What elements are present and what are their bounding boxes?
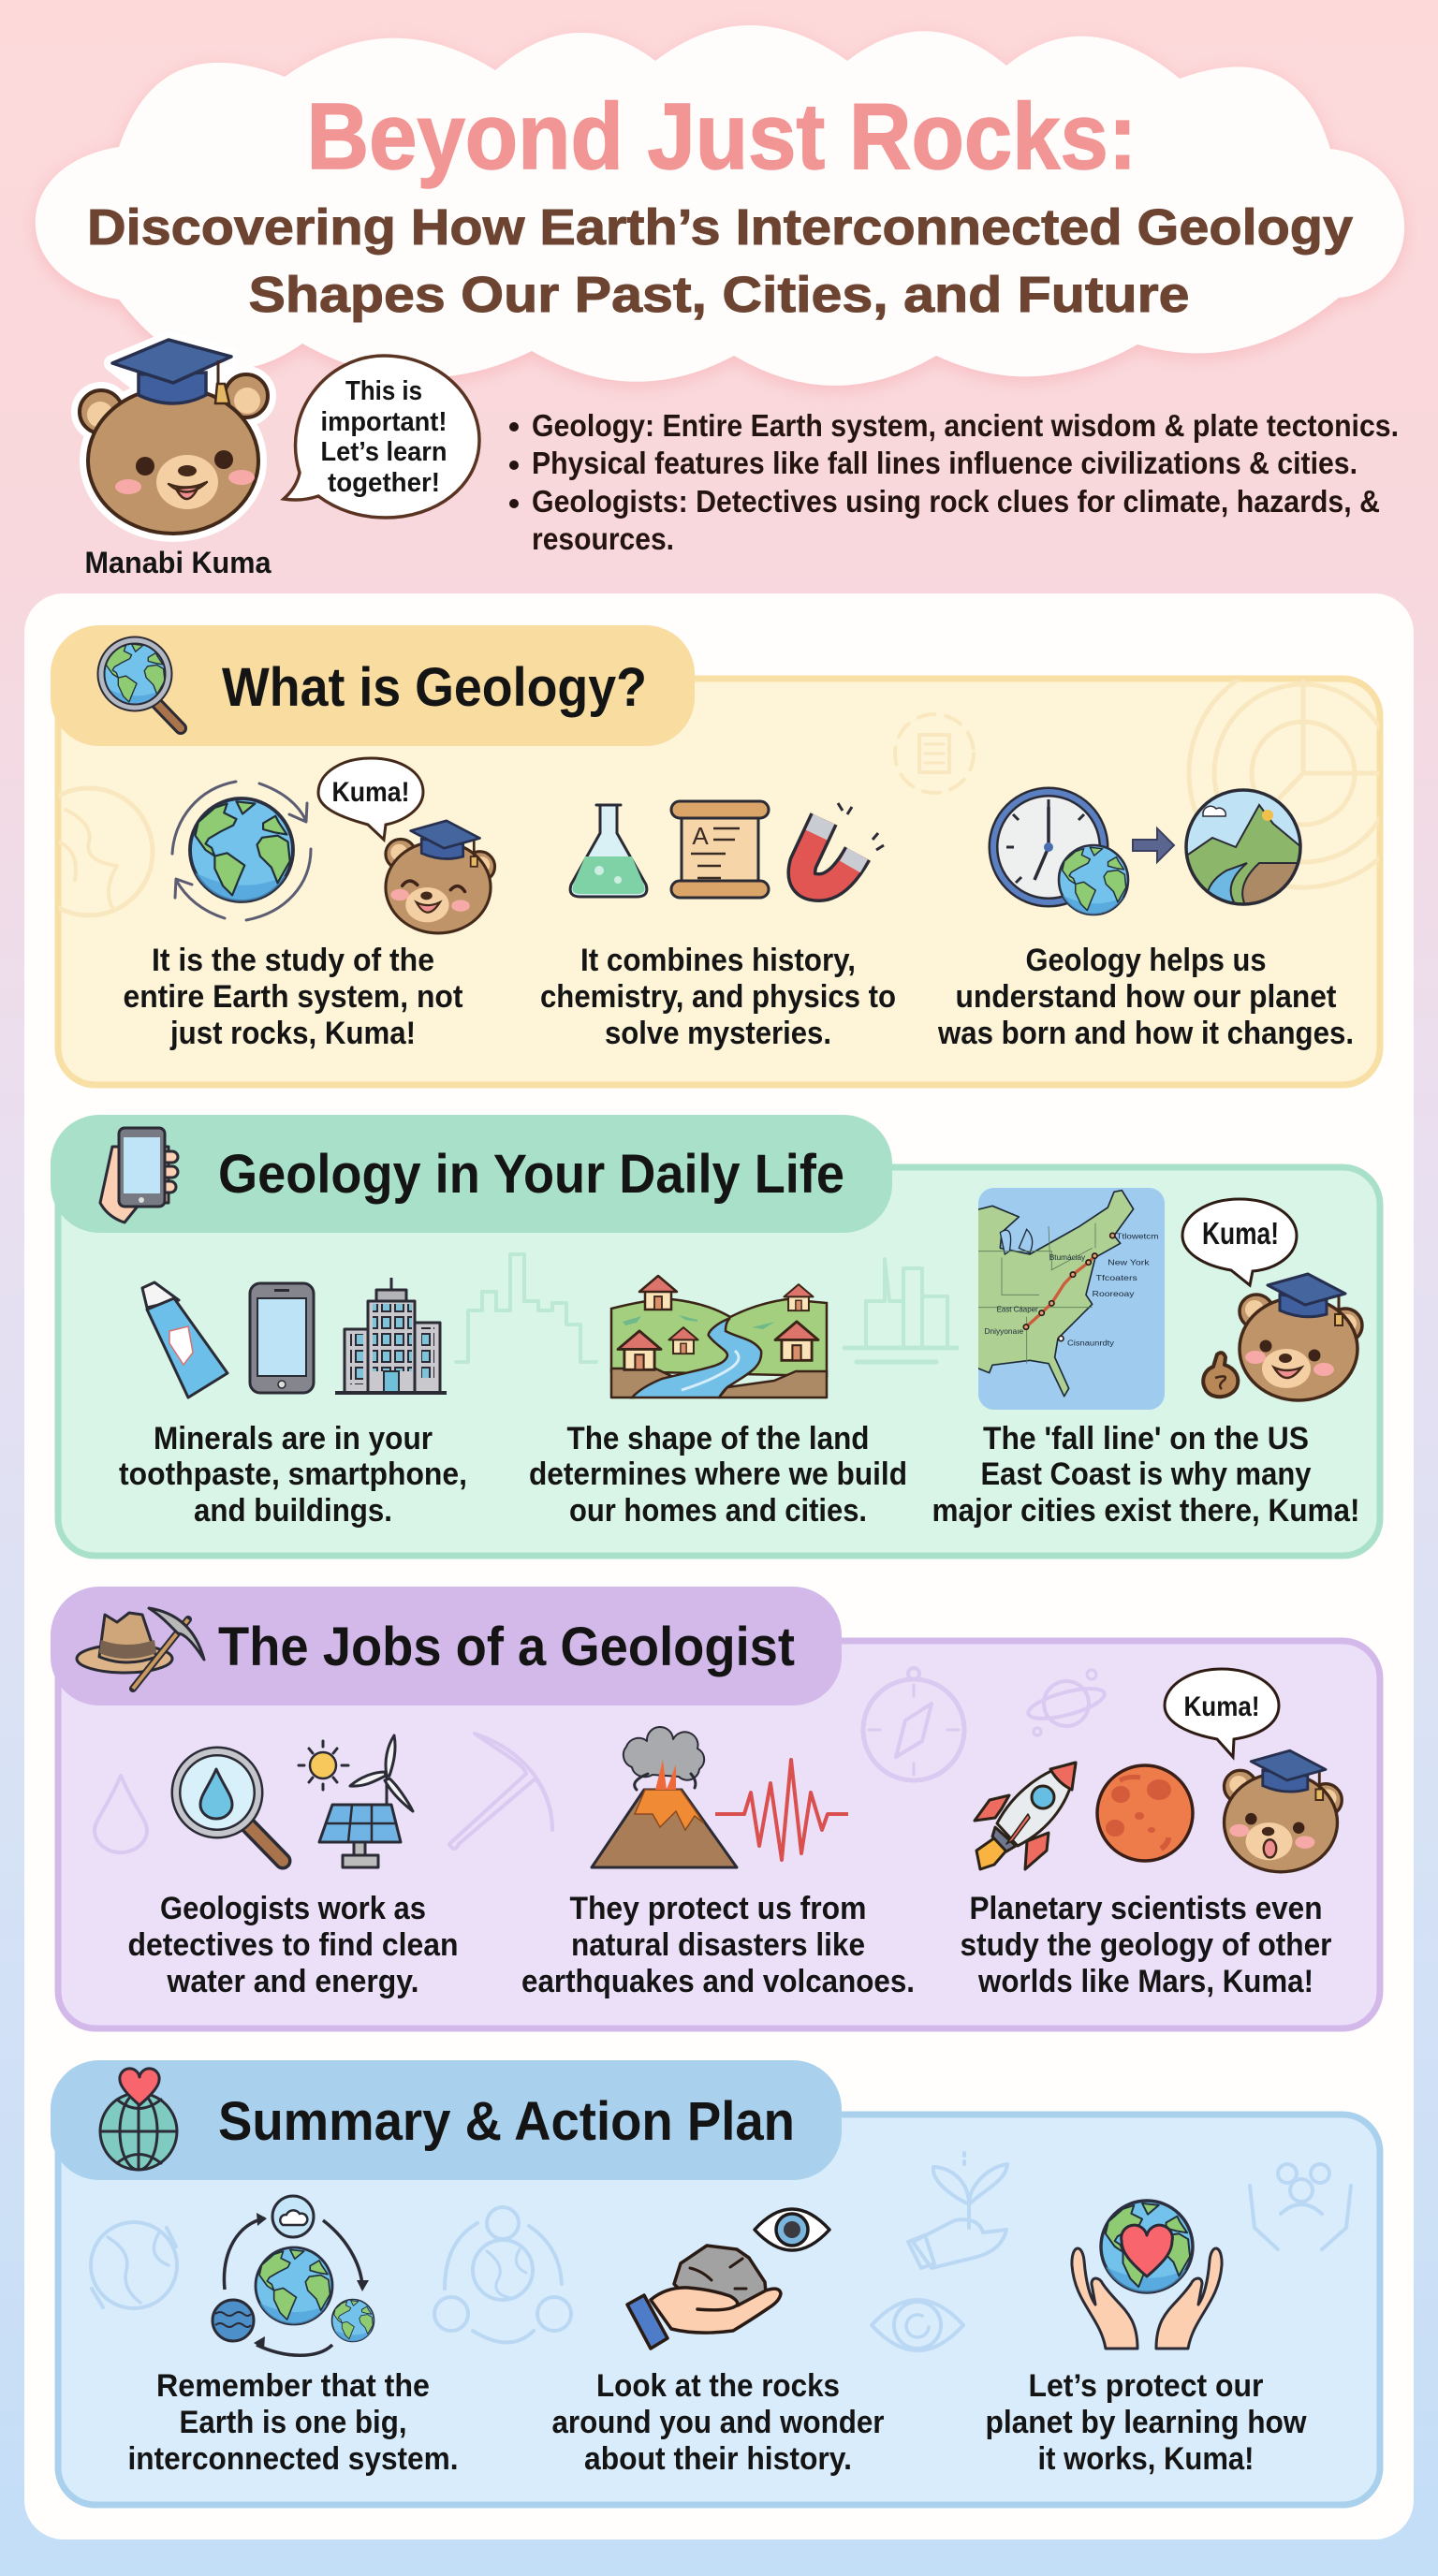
tab heading — [51, 1587, 842, 1705]
icon: interconnected Earth cycle — [213, 2196, 374, 2355]
icon: hands holding Earth with heart — [1072, 2201, 1222, 2349]
text: Jobs items: detectives to find clean — [127, 1927, 459, 1963]
key points: Geologists: Detectives using rock clues for climate, hazards, & — [532, 484, 1380, 519]
icon: land, river and houses — [611, 1276, 827, 1398]
icon: office building — [335, 1278, 447, 1393]
text: What is Geology items: Geology helps us — [1026, 943, 1266, 978]
text: Jobs items: natural disasters like — [571, 1927, 865, 1963]
map: US East Coast fall line: Btumáciay — [1049, 1252, 1086, 1262]
text: Jobs items: They protect us from — [569, 1891, 867, 1926]
icon: clock with earth — [993, 792, 1128, 915]
key points — [509, 408, 1399, 556]
tab heading — [51, 625, 695, 746]
text: Summary items: planet by learning how — [985, 2405, 1307, 2440]
text: Summary items: about their history. — [584, 2441, 852, 2477]
decorative icons — [95, 1668, 1108, 1852]
text: Daily Life items: our homes and cities. — [569, 1493, 867, 1529]
map: US East Coast fall line: Cisnaunrdty — [1067, 1338, 1115, 1347]
text: Jobs items: Geologists work as — [160, 1891, 426, 1926]
mascot: Manabi Kuma: Manabi Kuma — [84, 546, 271, 579]
text: Jobs items: earthquakes and volcanoes. — [521, 1964, 915, 1999]
tab heading — [51, 2060, 842, 2180]
panel: Summary & Action Plan — [51, 2060, 1380, 2505]
text: Summary items: Let’s protect our — [1028, 2368, 1264, 2404]
icon: hand holding phone — [100, 1128, 178, 1222]
key points: resources. — [532, 521, 674, 556]
icon: rocket — [975, 1763, 1076, 1869]
map: US East Coast fall line: Dniyyonaıe — [984, 1326, 1023, 1336]
text: Summary items: Look at the rocks — [596, 2368, 840, 2404]
icon: water magnifier — [176, 1751, 283, 1861]
icon: Mars — [1097, 1765, 1193, 1861]
text: What is Geology items: entire Earth system, not — [124, 979, 462, 1015]
speech bubble: Let’s learn — [320, 437, 448, 467]
text: What is Geology items: solve mysteries. — [605, 1016, 831, 1051]
icon: magnet — [801, 803, 884, 887]
text: Summary items: Earth is one big, — [180, 2405, 406, 2440]
speech bubble: important! — [320, 407, 448, 437]
decorative skylines — [456, 1254, 957, 1362]
title: Shapes Our Past, Cities, and Future — [249, 267, 1189, 323]
text: Daily Life items: The shape of the land — [567, 1421, 869, 1456]
text: Jobs items — [127, 1891, 1331, 1999]
map: US East Coast fall line: Tfcoaters — [1095, 1273, 1138, 1282]
text: What is Geology items: understand how our planet — [955, 979, 1337, 1015]
speech bubble: This is — [345, 376, 422, 406]
bubble: Kuma: Kuma! — [1183, 1691, 1260, 1722]
icon: sun, wind turbine and solar panel — [299, 1735, 413, 1867]
icon: volcano — [592, 1727, 737, 1867]
map: US East Coast fall line — [974, 1188, 1165, 1410]
icon: explorer hat and pickaxe — [77, 1608, 204, 1689]
icon: earth with cycle arrows — [172, 782, 311, 920]
icon: seismograph — [715, 1760, 848, 1860]
title — [87, 84, 1353, 323]
title: Discovering How Earth’s Interconnected Geology — [87, 199, 1353, 256]
bubble: Kuma — [318, 758, 423, 840]
text: Daily Life items: toothpaste, smartphone, — [119, 1456, 467, 1492]
bear: thumbs up — [1203, 1274, 1362, 1400]
bubble: Kuma — [1165, 1669, 1279, 1757]
text: What is Geology items: It is the study of the — [152, 943, 434, 978]
decorative background icons — [59, 680, 1379, 917]
text: Summary items — [127, 2368, 1307, 2477]
icon: scroll — [671, 801, 769, 898]
icon: magnifying globe — [101, 640, 181, 728]
bubble: Kuma — [1182, 1199, 1297, 1285]
panel: The Jobs of a Geologist — [51, 1587, 1380, 2028]
text: Daily Life items: Minerals are in your — [154, 1421, 433, 1456]
bear: happy — [386, 821, 495, 933]
text: What is Geology items — [124, 943, 1354, 1051]
sticker outline — [80, 340, 268, 534]
tab heading: Summary & Action Plan — [218, 2091, 795, 2152]
title cloud — [36, 25, 1404, 390]
icon: hand holding rock — [627, 2246, 781, 2349]
panel: What is Geology — [25, 625, 1417, 1085]
text: Summary items: around you and wonder — [552, 2405, 884, 2440]
map: US East Coast fall line: Ttlowetcm — [1116, 1231, 1158, 1240]
icon: flask — [570, 805, 647, 897]
mascot: Manabi Kuma — [80, 340, 271, 579]
text: Jobs items: study the geology of other — [961, 1927, 1331, 1963]
tab heading — [51, 1115, 892, 1233]
text: What is Geology items: chemistry, and physics to — [540, 979, 896, 1015]
map: US East Coast fall line: Rooreoay — [1092, 1289, 1135, 1298]
arrow — [1133, 828, 1174, 862]
speech bubble — [284, 356, 479, 518]
map: US East Coast fall line: East Cáaper — [997, 1304, 1038, 1313]
text: Daily Life items — [119, 1421, 1359, 1529]
text: What is Geology items: was born and how it changes. — [937, 1016, 1354, 1051]
text: What is Geology items: It combines history, — [580, 943, 856, 978]
bubble: Kuma: Kuma! — [331, 777, 410, 808]
icon: toothpaste — [142, 1282, 227, 1398]
tab heading: Geology in Your Daily Life — [218, 1144, 844, 1205]
panel: Geology in Your Daily Life — [51, 1115, 1380, 1556]
text: Daily Life items: and buildings. — [194, 1493, 392, 1529]
title: Beyond Just Rocks: — [307, 84, 1137, 189]
icon: globe with heart — [100, 2069, 177, 2170]
icon: eye — [755, 2209, 829, 2250]
speech bubble: together! — [328, 468, 440, 498]
tab heading: What is Geology? — [222, 657, 647, 718]
text: Summary items: Remember that the — [156, 2368, 430, 2404]
icon: smartphone — [250, 1283, 314, 1393]
decorative icons — [91, 2151, 1351, 2350]
text: Jobs items: worlds like Mars, Kuma! — [977, 1964, 1313, 1999]
text: Daily Life items: East Coast is why many — [981, 1456, 1312, 1492]
text: Summary items: it works, Kuma! — [1037, 2441, 1255, 2477]
text: Daily Life items: major cities exist there, Kuma! — [932, 1493, 1359, 1529]
key points: Physical features like fall lines influence civilizations & cities. — [532, 446, 1357, 480]
text: Jobs items: water and energy. — [167, 1964, 419, 1999]
bear: surprised — [1225, 1750, 1342, 1872]
text: Daily Life items: determines where we build — [529, 1456, 907, 1492]
text: Daily Life items: The 'fall line' on the US — [983, 1421, 1309, 1456]
icon: scroll: A — [692, 822, 709, 850]
tab heading: The Jobs of a Geologist — [218, 1617, 795, 1677]
icon: landscape circle — [1185, 789, 1306, 905]
text: Summary items: interconnected system. — [127, 2441, 459, 2477]
map: US East Coast fall line: New York — [1108, 1258, 1150, 1267]
bubble: Kuma: Kuma! — [1202, 1216, 1279, 1251]
text: What is Geology items: just rocks, Kuma! — [169, 1016, 416, 1051]
white content panel — [24, 593, 1414, 2539]
text: Jobs items: Planetary scientists even — [970, 1891, 1322, 1926]
